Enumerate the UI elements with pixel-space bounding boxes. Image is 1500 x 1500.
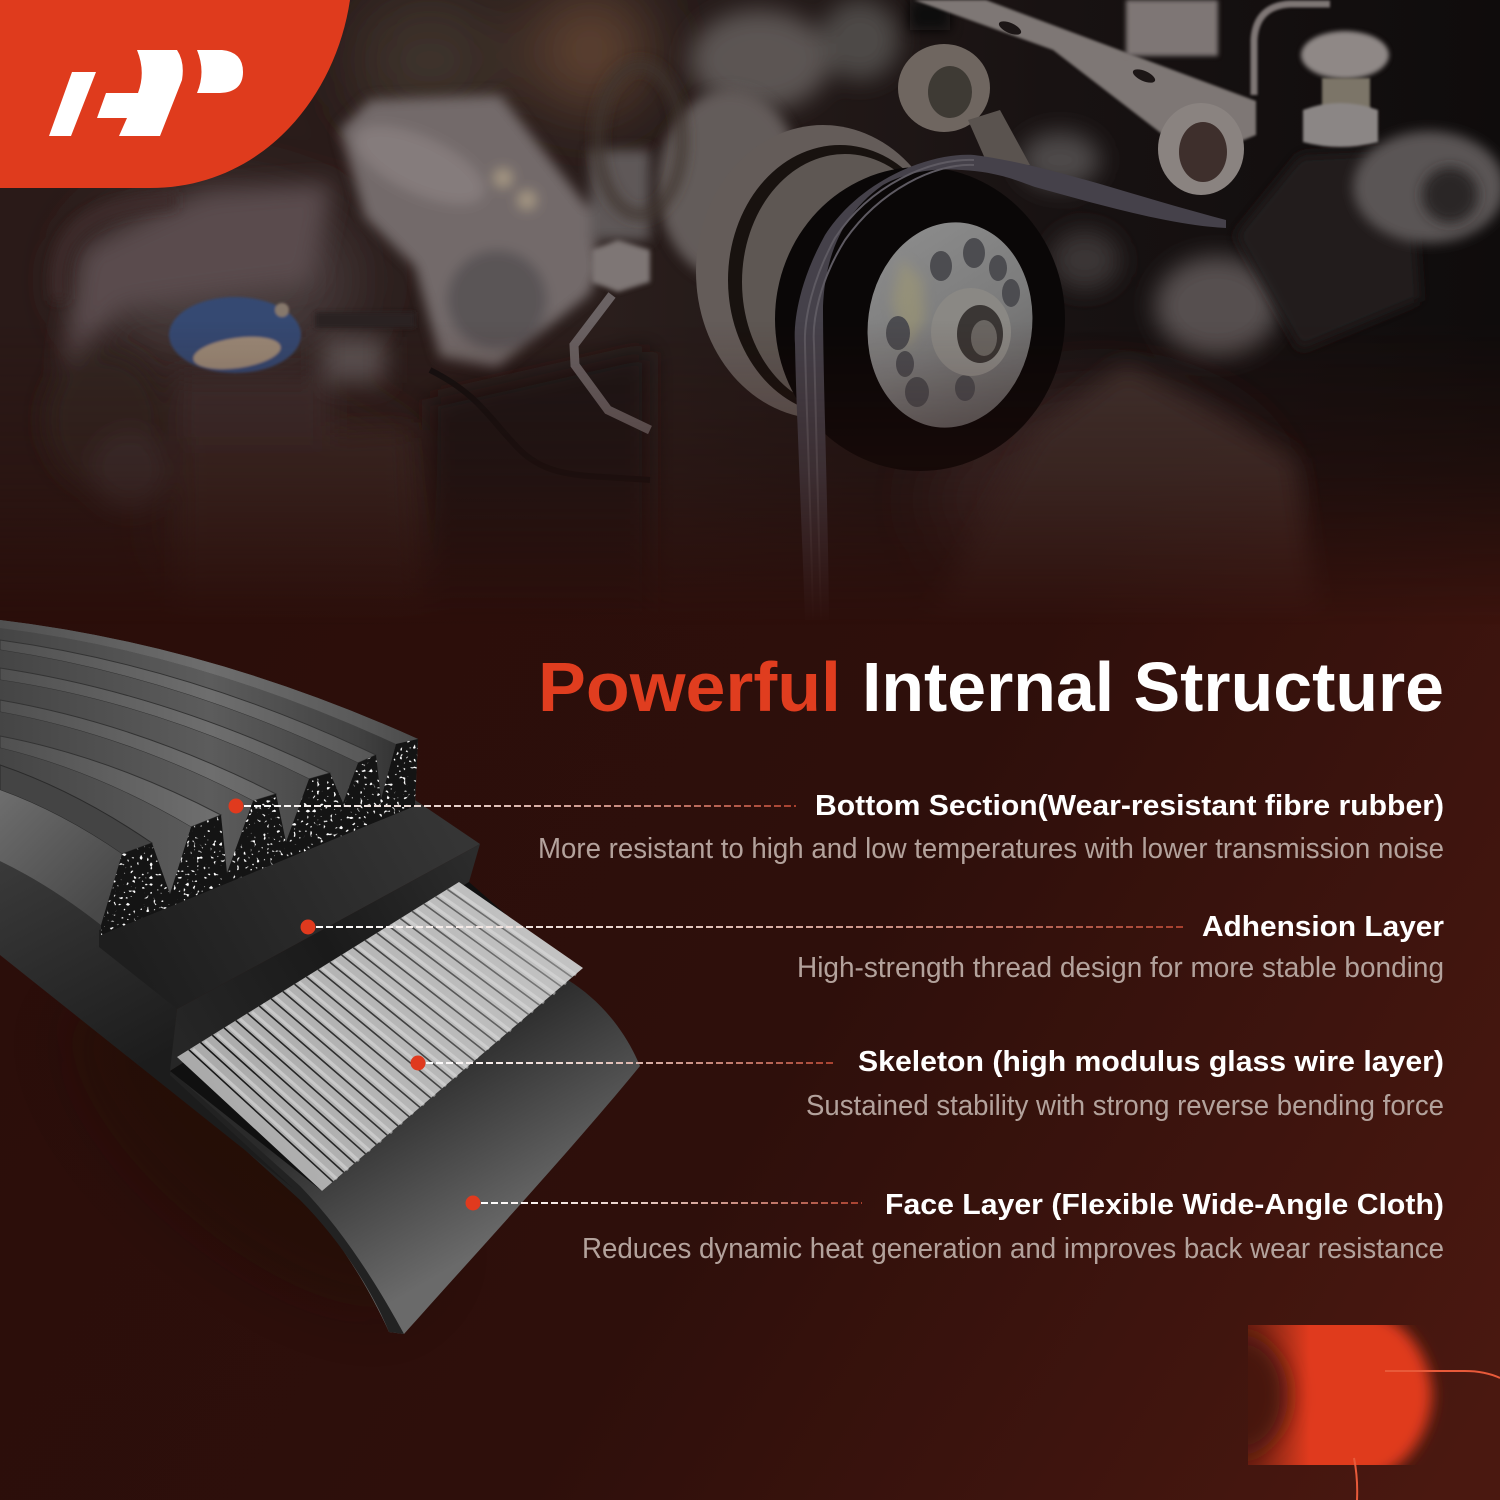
engine parts: right side [914, 0, 1500, 350]
callout: bottom section: Bottom Section(Wear-resistant fibre rubber) [815, 790, 1444, 822]
callout: face layer: Reduces dynamic heat generation and improves back wear resistance [582, 1233, 1444, 1265]
callout: face layer: Face Layer (Flexible Wide-Angle Cloth) [885, 1189, 1444, 1221]
adhesion layer [99, 800, 575, 1191]
engine photo background [0, 0, 1500, 640]
callout: skeleton: Sustained stability with strong reverse bending force [806, 1090, 1444, 1122]
engine parts: tensioner and rear pulleys [598, 44, 1030, 419]
pipes and hoses [58, 200, 650, 480]
decorative corner emblem [1248, 1325, 1500, 1500]
speckled rubber cross-section [95, 735, 425, 940]
belt illustration [0, 620, 640, 1360]
title: Internal Structure [862, 648, 1444, 726]
belt body side [0, 845, 295, 1190]
title [538, 648, 1444, 726]
callout: adhesion layer: High-strength thread design for more stable bonding [797, 952, 1444, 984]
callout: adhesion layer [300, 911, 1444, 984]
ribbed bottom section [0, 620, 425, 940]
callout: bottom section: More resistant to high and low temperatures with lower transmission noise [538, 833, 1444, 865]
callout: skeleton: Skeleton (high modulus glass wire layer) [858, 1046, 1444, 1078]
callout: adhesion layer: Adhension Layer [1202, 911, 1444, 943]
pulley with belt [775, 155, 1226, 620]
icon: logo mark [49, 50, 243, 136]
title: Powerful [538, 648, 841, 726]
callout: skeleton [410, 1046, 1444, 1122]
face layer [168, 980, 640, 1334]
skeleton wire layer [177, 882, 583, 1191]
icon: blue reservoir cap [169, 297, 301, 374]
logo badge [0, 0, 350, 188]
callout: bottom section [228, 790, 1444, 865]
callout: face layer [466, 1189, 1444, 1265]
